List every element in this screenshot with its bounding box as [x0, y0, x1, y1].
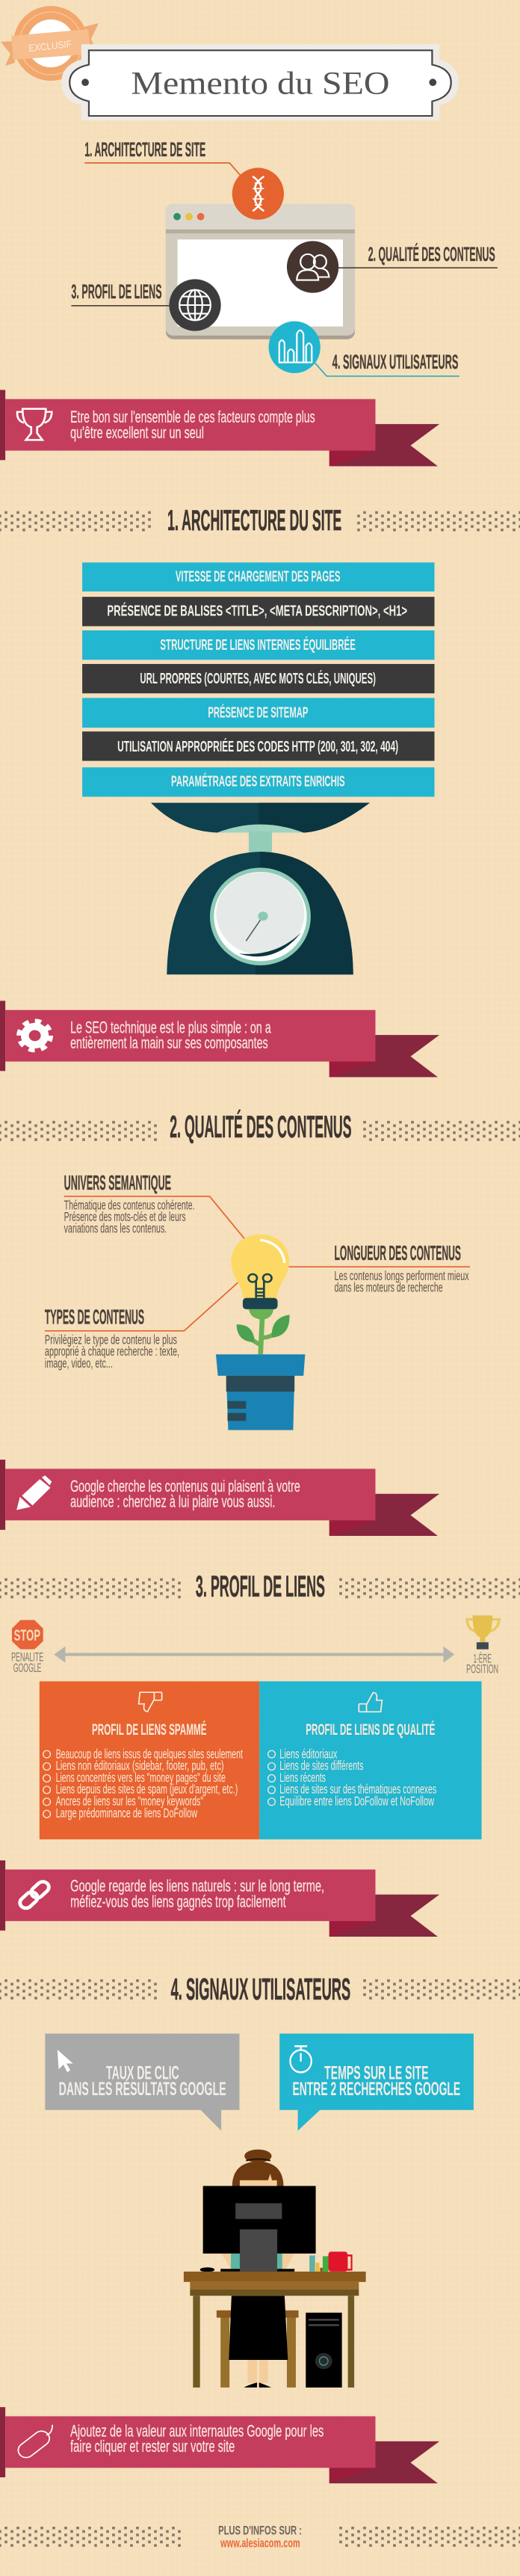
banner text: Ajoutez de la valeur aux internautes Google pour les — [70, 2421, 324, 2440]
callout: types de contenus: image, video, etc... — [45, 1356, 113, 1371]
bullet list: Liens depuis des sites de spam (jeux d'argent, etc.) — [56, 1782, 238, 1796]
banner 5 — [0, 2407, 439, 2483]
section: intro overview: 3. PROFIL DE LIENS — [71, 280, 162, 303]
bullet list: Liens concentrés vers les "money pages" du site — [56, 1771, 226, 1785]
callout text — [293, 2062, 460, 2100]
icon: stop sign: STOP — [14, 1626, 40, 1644]
callout: taux de clic — [45, 2034, 239, 2130]
footer divider — [0, 2527, 520, 2547]
banner text — [70, 408, 315, 442]
icon: bar chart — [269, 322, 321, 373]
bullet list: Ancres de liens sur les "money keywords" — [56, 1794, 203, 1808]
banner text: Google cherche les contenus qui plaisent à votre — [70, 1477, 300, 1496]
badge: exclusif — [1, 6, 99, 81]
callout: univers semantique: UNIVERS SEMANTIQUE — [64, 1172, 171, 1195]
label: penalite google — [11, 1650, 43, 1675]
arrow: scale of link quality — [54, 1647, 454, 1663]
bar list: VITESSE DE CHARGEMENT DES PAGES — [176, 569, 340, 585]
heading: 4. SIGNAUX UTILISATEURS — [171, 1973, 350, 2007]
banner 4 — [0, 1860, 439, 1937]
bullet list: Beaucoup de liens issus de quelques sites seulement — [56, 1747, 243, 1762]
banner text: audience : cherchez à lui plaire vous aussi. — [70, 1493, 275, 1510]
bullet list — [43, 1747, 243, 1820]
bullet list — [268, 1747, 436, 1808]
panel: profil de qualite — [259, 1682, 482, 1839]
bar list: STRUCTURE DE LIENS INTERNES ÉQUILIBRÉE — [160, 636, 356, 654]
icon: trophy — [17, 409, 52, 440]
bar list: PRÉSENCE DE SITEMAP — [208, 704, 309, 722]
bullet list: Liens de sites différents — [279, 1759, 364, 1773]
panel: profil spamme — [40, 1682, 259, 1839]
callout: univers semantique: Thématique des contenus cohérente. — [64, 1198, 195, 1212]
banner text: faire cliquer et rester sur votre site — [70, 2437, 235, 2456]
callout: types de contenus — [45, 1282, 239, 1371]
icon: light bulb plant — [216, 1235, 305, 1430]
bar list — [82, 562, 435, 797]
label: 1ere position: 1-ÈRE — [473, 1652, 492, 1665]
bar list: PARAMÉTRAGE DES EXTRAITS ENRICHIS — [171, 773, 345, 790]
icon: globe — [169, 279, 221, 331]
callout: longueur des contenus: dans les moteurs de recherche — [334, 1280, 443, 1294]
badge: exclusif: EXCLUSIF — [28, 38, 72, 54]
callout: univers semantique: variations dans les contenus. — [64, 1221, 167, 1235]
heading: 1. ARCHITECTURE DU SITE — [167, 504, 341, 536]
panel heading: PROFIL DE LIENS SPAMMÉ — [92, 1721, 207, 1739]
label 3: profil de liens — [71, 280, 169, 306]
section divider 2 — [0, 1121, 520, 1141]
label 1: architecture de site — [84, 138, 241, 176]
banner text: qu'être excellent sur un seul — [70, 423, 204, 442]
banner 2 — [0, 1000, 439, 1077]
section: signaux utilisateurs — [45, 1973, 474, 2388]
section: architecture du site — [82, 504, 435, 974]
label 4: signaux utilisateurs — [315, 351, 459, 376]
icon: users — [287, 241, 338, 293]
title plaque: Memento du SEO — [131, 65, 390, 101]
label 1: architecture de site: 1. ARCHITECTURE DE SITE — [84, 138, 205, 161]
icon: stop sign — [12, 1620, 43, 1650]
icon: gold trophy — [467, 1615, 499, 1650]
icon: mouse — [15, 2425, 52, 2461]
icon: chain — [17, 1879, 52, 1911]
bullet list: Liens éditoriaux — [279, 1747, 337, 1762]
icon: cursor — [58, 2050, 73, 2072]
banner 1 — [0, 390, 439, 466]
callout text: DANS LES RÉSULTATS GOOGLE — [59, 2078, 226, 2100]
banner text — [70, 1477, 300, 1510]
section divider 1 — [0, 511, 520, 532]
icon: pencil — [16, 1475, 52, 1510]
section: profil de liens: 3. PROFIL DE LIENS — [196, 1570, 325, 1603]
banner text: Google regarde les liens naturels : sur le long terme, — [70, 1876, 324, 1895]
section divider 4 — [0, 1979, 520, 1999]
icon: scale — [151, 803, 370, 974]
callout: univers semantique — [64, 1172, 245, 1239]
callout: longueur des contenus — [288, 1242, 470, 1294]
bar list: URL PROPRES (COURTES, AVEC MOTS CLÉS, UNIQUES) — [140, 670, 376, 687]
banner text — [70, 1018, 271, 1052]
footer: PLUS D'INFOS SUR : — [218, 2524, 302, 2538]
label: penalite google: PENALITE — [11, 1650, 43, 1664]
banner text: méfiez-vous des liens gagnés trop facilement — [70, 1892, 286, 1911]
callout text — [59, 2062, 226, 2100]
bullet list: Liens non éditoriaux (sidebar, footer, pub, etc) — [56, 1759, 224, 1773]
icon: thumb up — [359, 1693, 382, 1712]
section: profil de liens — [11, 1570, 499, 1839]
banner text: Le SEO technique est le plus simple : on a — [70, 1018, 271, 1036]
banner text — [70, 1876, 324, 1911]
callout text: TEMPS SUR LE SITE — [324, 2062, 429, 2083]
callout text: TAUX DE CLIC — [106, 2062, 179, 2083]
banner text — [70, 2421, 324, 2456]
callout: temps sur le site — [279, 2034, 474, 2130]
bullet list: Liens récents — [279, 1771, 326, 1785]
footer: www.alesiacom.com — [220, 2537, 300, 2551]
banner text: Etre bon sur l'ensemble de ces facteurs compte plus — [70, 408, 315, 426]
callout: types de contenus: Privilégiez le type de contenu le plus — [45, 1332, 177, 1347]
section: intro overview — [61, 44, 498, 376]
section: qualite des contenus — [45, 1109, 470, 1430]
label: 1ere position — [466, 1652, 498, 1676]
footer — [218, 2524, 302, 2551]
banner 3 — [0, 1460, 439, 1536]
section divider 3 — [0, 1579, 520, 1599]
title plaque — [61, 44, 459, 120]
icon: dna — [232, 167, 284, 220]
callout: univers semantique: Présence des mots-clés et de leurs — [64, 1210, 186, 1224]
icon: stopwatch — [290, 2047, 312, 2072]
callout: types de contenus: approprié à chaque recherche : texte, — [45, 1344, 179, 1359]
icon: thumb down — [139, 1692, 162, 1712]
callout: types de contenus: TYPES DE CONTENUS — [45, 1306, 144, 1329]
banner text: entièrement la main sur ses composantes — [70, 1033, 268, 1052]
browser window — [166, 204, 355, 339]
bar list: PRÉSENCE DE BALISES <TITLE>, <META DESCRIPTION>, <H1> — [107, 603, 407, 620]
bullet list: Large prédominance de liens DoFollow — [56, 1806, 197, 1820]
illustration: woman at desk — [184, 2150, 366, 2388]
icon: gear — [19, 1021, 51, 1051]
label: penalite google: GOOGLE — [13, 1662, 41, 1675]
